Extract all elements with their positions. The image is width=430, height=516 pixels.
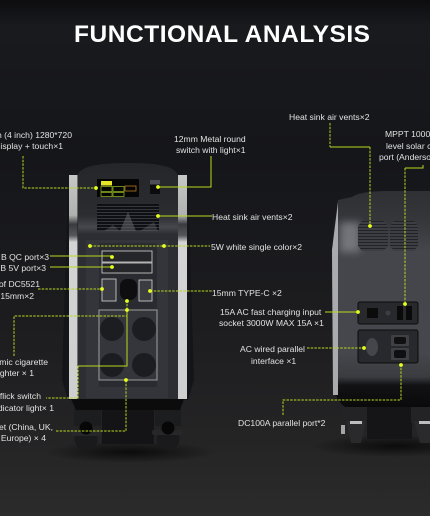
centre callout labels: AC wired parallel	[240, 344, 305, 354]
upper back panel	[358, 302, 418, 324]
centre callout labels	[174, 134, 326, 428]
centre callout labels: 12mm Metal round	[174, 134, 246, 144]
centre callout labels: DC100A parallel port*2	[238, 418, 326, 428]
left callout labels: et (China, UK,	[0, 422, 53, 432]
left callout labels: B QC port×3	[1, 252, 49, 262]
centre callout labels: switch with light×1	[176, 145, 246, 155]
USB ports	[102, 251, 152, 273]
back body	[332, 191, 430, 407]
left callout labels	[0, 130, 72, 443]
front view of power station	[62, 163, 194, 450]
front heat sink vents	[97, 204, 159, 231]
front body	[78, 163, 178, 400]
silver side strips	[69, 175, 187, 399]
front casters	[71, 408, 183, 450]
display screen	[97, 179, 139, 197]
metal round switch	[150, 180, 160, 194]
left callout labels: B 5V port×3	[0, 263, 46, 273]
centre callout labels: 15mm TYPE-C ×2	[212, 288, 282, 298]
front port panel	[86, 240, 168, 398]
lower back panel	[358, 330, 418, 363]
left callout labels: mic cigarette	[0, 357, 48, 367]
centre callout labels: interface ×1	[251, 356, 296, 366]
DC and Type-C ports	[102, 279, 152, 301]
left callout labels: of DC5521	[0, 279, 40, 289]
left callout labels: Europe) × 4	[1, 433, 46, 443]
centre callout labels: Heat sink air vents×2	[212, 212, 293, 222]
centre callout labels: socket 3000W MAX 15A ×1	[219, 318, 324, 328]
right callout labels: Heat sink air vents×2	[289, 112, 370, 122]
four AC sockets	[99, 310, 157, 380]
back side highlight	[332, 202, 360, 395]
back casters	[341, 405, 430, 443]
left callout labels: 15mm×2	[0, 291, 34, 301]
centre callout labels: 15A AC fast charging input	[220, 307, 322, 317]
leader lines and dots	[14, 123, 423, 431]
back vents	[358, 221, 418, 251]
front bottom base	[71, 399, 184, 410]
right callout labels	[289, 112, 430, 162]
front outer shell	[62, 180, 194, 400]
title: FUNCTIONAL ANALYSIS	[74, 21, 370, 48]
centre callout labels: 5W white single color×2	[211, 242, 302, 252]
left callout labels: flick switch	[0, 391, 41, 401]
floor shadows	[45, 435, 430, 463]
back view of power station	[332, 191, 430, 443]
